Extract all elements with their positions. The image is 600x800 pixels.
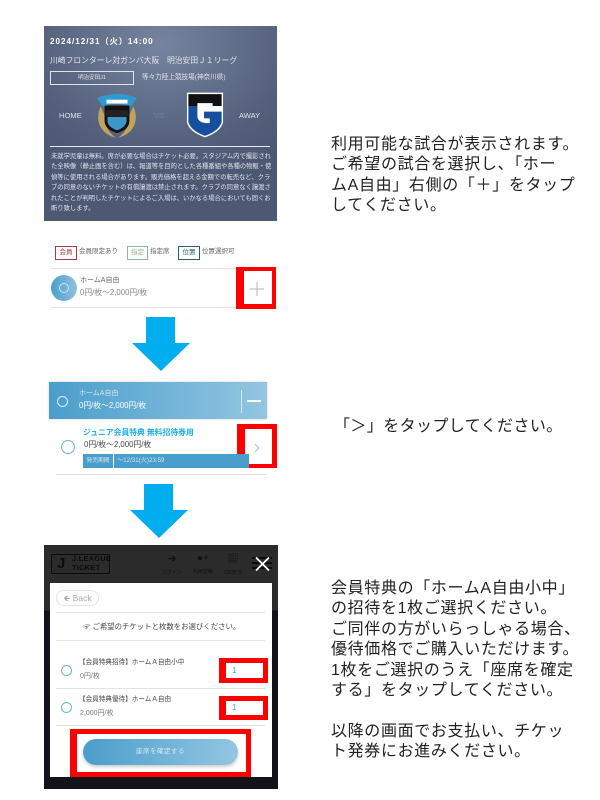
benefit title: ジュニア会員特典 無料招待券用 bbox=[83, 428, 194, 437]
highlight: chevron button bbox=[237, 424, 277, 468]
notice text: 未就学児童は無料。席が必要な場合はチケット必要。スタジアム内で撮影された全映像（静止画を含む）は、報道等を目的とした各種番組や各種の物販・使偵等に使用される場合があります。販売価格を超える金額での転売など、クラブの同意のないチケットの有償譲渡は禁止されます。クラブの同意なく譲渡されたことが判明したチケットによるご入場は、いかなる場合においても固くお断り致します。 bbox=[51, 153, 271, 212]
sale period label: 発売期間 bbox=[86, 458, 110, 464]
text block: step 3 instructions: 優待価格でご購入いただけます。 bbox=[331, 641, 579, 658]
inner ring bbox=[59, 283, 69, 293]
sale period label bbox=[83, 454, 113, 468]
panel: ticket quantity modal screenshot bbox=[44, 545, 278, 789]
confirm button: 座席を確定する bbox=[136, 748, 185, 755]
price: 0円/枚〜2,000円/枚 bbox=[84, 440, 151, 449]
quantity box highlight 2 bbox=[219, 696, 268, 720]
highlight: plus button bbox=[236, 267, 276, 309]
vs label: VS bbox=[154, 111, 164, 120]
back button: 🡸 Back bbox=[63, 593, 92, 603]
match date: 2024/12/31（火）14:00 bbox=[50, 37, 154, 46]
icon: close X bbox=[252, 556, 272, 572]
divider bbox=[241, 390, 242, 413]
arrow: down 2 bbox=[130, 484, 188, 538]
quantity box highlight 1: 1 bbox=[232, 666, 236, 675]
header menu: login bbox=[162, 553, 182, 576]
label: reserved seat: 指定席 bbox=[150, 248, 170, 255]
back button bbox=[56, 590, 99, 606]
tag: members bbox=[55, 246, 77, 260]
tag: members: 会員 bbox=[60, 249, 72, 256]
expand plus sign bbox=[250, 282, 264, 296]
panel: ticket row expanded bbox=[49, 382, 267, 419]
label: position selectable: 位置選択可 bbox=[202, 248, 234, 255]
ticket price: 2,000円/枚 bbox=[80, 710, 113, 717]
divider bbox=[56, 612, 265, 613]
header menu: register bbox=[193, 553, 213, 575]
text block: step 3 instructions: 1枚をご選択のうえ「座席を確定 bbox=[331, 662, 574, 679]
logo: J.League Ticket: J.LEAGUE bbox=[72, 554, 111, 563]
legend: seat tags bbox=[55, 246, 234, 260]
tag: position: 位置 bbox=[182, 249, 196, 256]
text block: step 3 instructions: 以降の画面でお支払い、チケッ bbox=[331, 723, 564, 740]
icon: radio circle bbox=[61, 440, 75, 454]
text block: step 3 instructions: ご同伴の方がいらっしゃる場合、 bbox=[331, 621, 581, 638]
text block: step 3 instructions: する」をタップしてください。 bbox=[331, 682, 563, 699]
ticket option: discount bbox=[56, 689, 265, 726]
panel: ticket row collapsed bbox=[50, 268, 275, 308]
match title: 川崎フロンターレ対ガンバ大阪 明治安田Ｊ１リーグ bbox=[50, 56, 237, 65]
icon: Kawasaki Frontale crest bbox=[97, 94, 137, 138]
chevron bbox=[254, 444, 260, 452]
header menu: register: ●+ bbox=[197, 553, 209, 564]
text block: step 1 instructions: してください。 bbox=[331, 197, 447, 214]
icon: Gamba Osaka crest bbox=[186, 92, 224, 138]
header menu: login: ➜ bbox=[167, 553, 177, 565]
letter J mark: J bbox=[57, 555, 65, 572]
tag: reserved bbox=[127, 246, 148, 260]
instruction: ☞ ご希望のチケットと枚数をお選びください。 bbox=[83, 622, 240, 631]
ticket option: invitation bbox=[56, 652, 265, 689]
away label: AWAY bbox=[239, 111, 260, 120]
icon: blue radio circle bbox=[51, 275, 77, 301]
header menu: QR bbox=[224, 553, 242, 576]
header menu: QR: ▦ bbox=[228, 553, 238, 565]
header menu: register: 利用登録 bbox=[193, 569, 213, 575]
home label: HOME bbox=[59, 111, 82, 120]
panel: match information card bbox=[44, 26, 277, 221]
arrow: down 1 bbox=[132, 317, 190, 371]
text block: step 3 instructions: ト発券にお進みください。 bbox=[331, 743, 531, 760]
text block: step 3 instructions bbox=[331, 579, 581, 760]
header menu: QR: QR表示 bbox=[224, 570, 242, 576]
quantity box highlight 2: 1 bbox=[232, 703, 236, 712]
sale period value bbox=[114, 454, 249, 468]
tag: position bbox=[178, 246, 200, 260]
text block: step 1 instructions: 利用可能な試合が表示されます。 bbox=[331, 136, 579, 153]
tag: reserved: 指定 bbox=[131, 249, 144, 256]
radio circle bbox=[61, 702, 72, 713]
ticket name: 【会員特典招待】ホームＡ自由小中 bbox=[79, 659, 184, 666]
ticket price: 0円/枚〜2,000円/枚 bbox=[79, 401, 146, 410]
ticket price: 0円/枚〜2,000円/枚 bbox=[80, 288, 147, 297]
logo: J.League Ticket bbox=[51, 554, 110, 574]
radio circle bbox=[61, 665, 72, 676]
text block: step 1 instructions bbox=[331, 135, 579, 214]
divider bbox=[56, 640, 265, 641]
label: members only: 会員限定あり bbox=[79, 248, 118, 255]
text block: step 1 instructions: ムA自由」右側の「＋」をタップ bbox=[331, 177, 575, 194]
ticket name: ホームA自由 bbox=[79, 390, 118, 397]
panel: white modal body bbox=[50, 583, 272, 777]
text block: step 3 instructions: 会員特典の「ホームA自由小中」 bbox=[331, 580, 575, 597]
sale period value: 〜12/31(火)23:59 bbox=[117, 457, 164, 464]
ticket price: 0円/枚 bbox=[80, 673, 100, 680]
quantity box highlight 1 bbox=[219, 658, 268, 683]
ticket name: 【会員特典優待】ホームＡ自由 bbox=[79, 696, 171, 703]
header menu: login: ログイン bbox=[162, 570, 182, 576]
collapse minus sign bbox=[247, 400, 261, 402]
confirm button bbox=[83, 739, 238, 765]
logo: J.League Ticket: TICKET bbox=[72, 562, 100, 572]
ticket name: ホームA自由 bbox=[80, 277, 119, 284]
icon: radio circle bbox=[57, 396, 68, 407]
stadium: 等々力陸上競技場(神奈川県) bbox=[142, 74, 226, 81]
text block: step 1 instructions: ご希望の試合を選択し、「ホー bbox=[331, 156, 556, 173]
text block: step 3 instructions: の招待を1枚ご選択ください。 bbox=[331, 600, 557, 617]
league label box bbox=[50, 71, 134, 85]
league label box: 明治安田J1 bbox=[78, 75, 106, 81]
panel: junior member ticket row bbox=[56, 420, 267, 475]
divider bbox=[50, 146, 270, 147]
confirm button highlight bbox=[70, 729, 251, 777]
text block: step 2 instruction: 「＞」をタップしてください。 bbox=[334, 418, 563, 435]
